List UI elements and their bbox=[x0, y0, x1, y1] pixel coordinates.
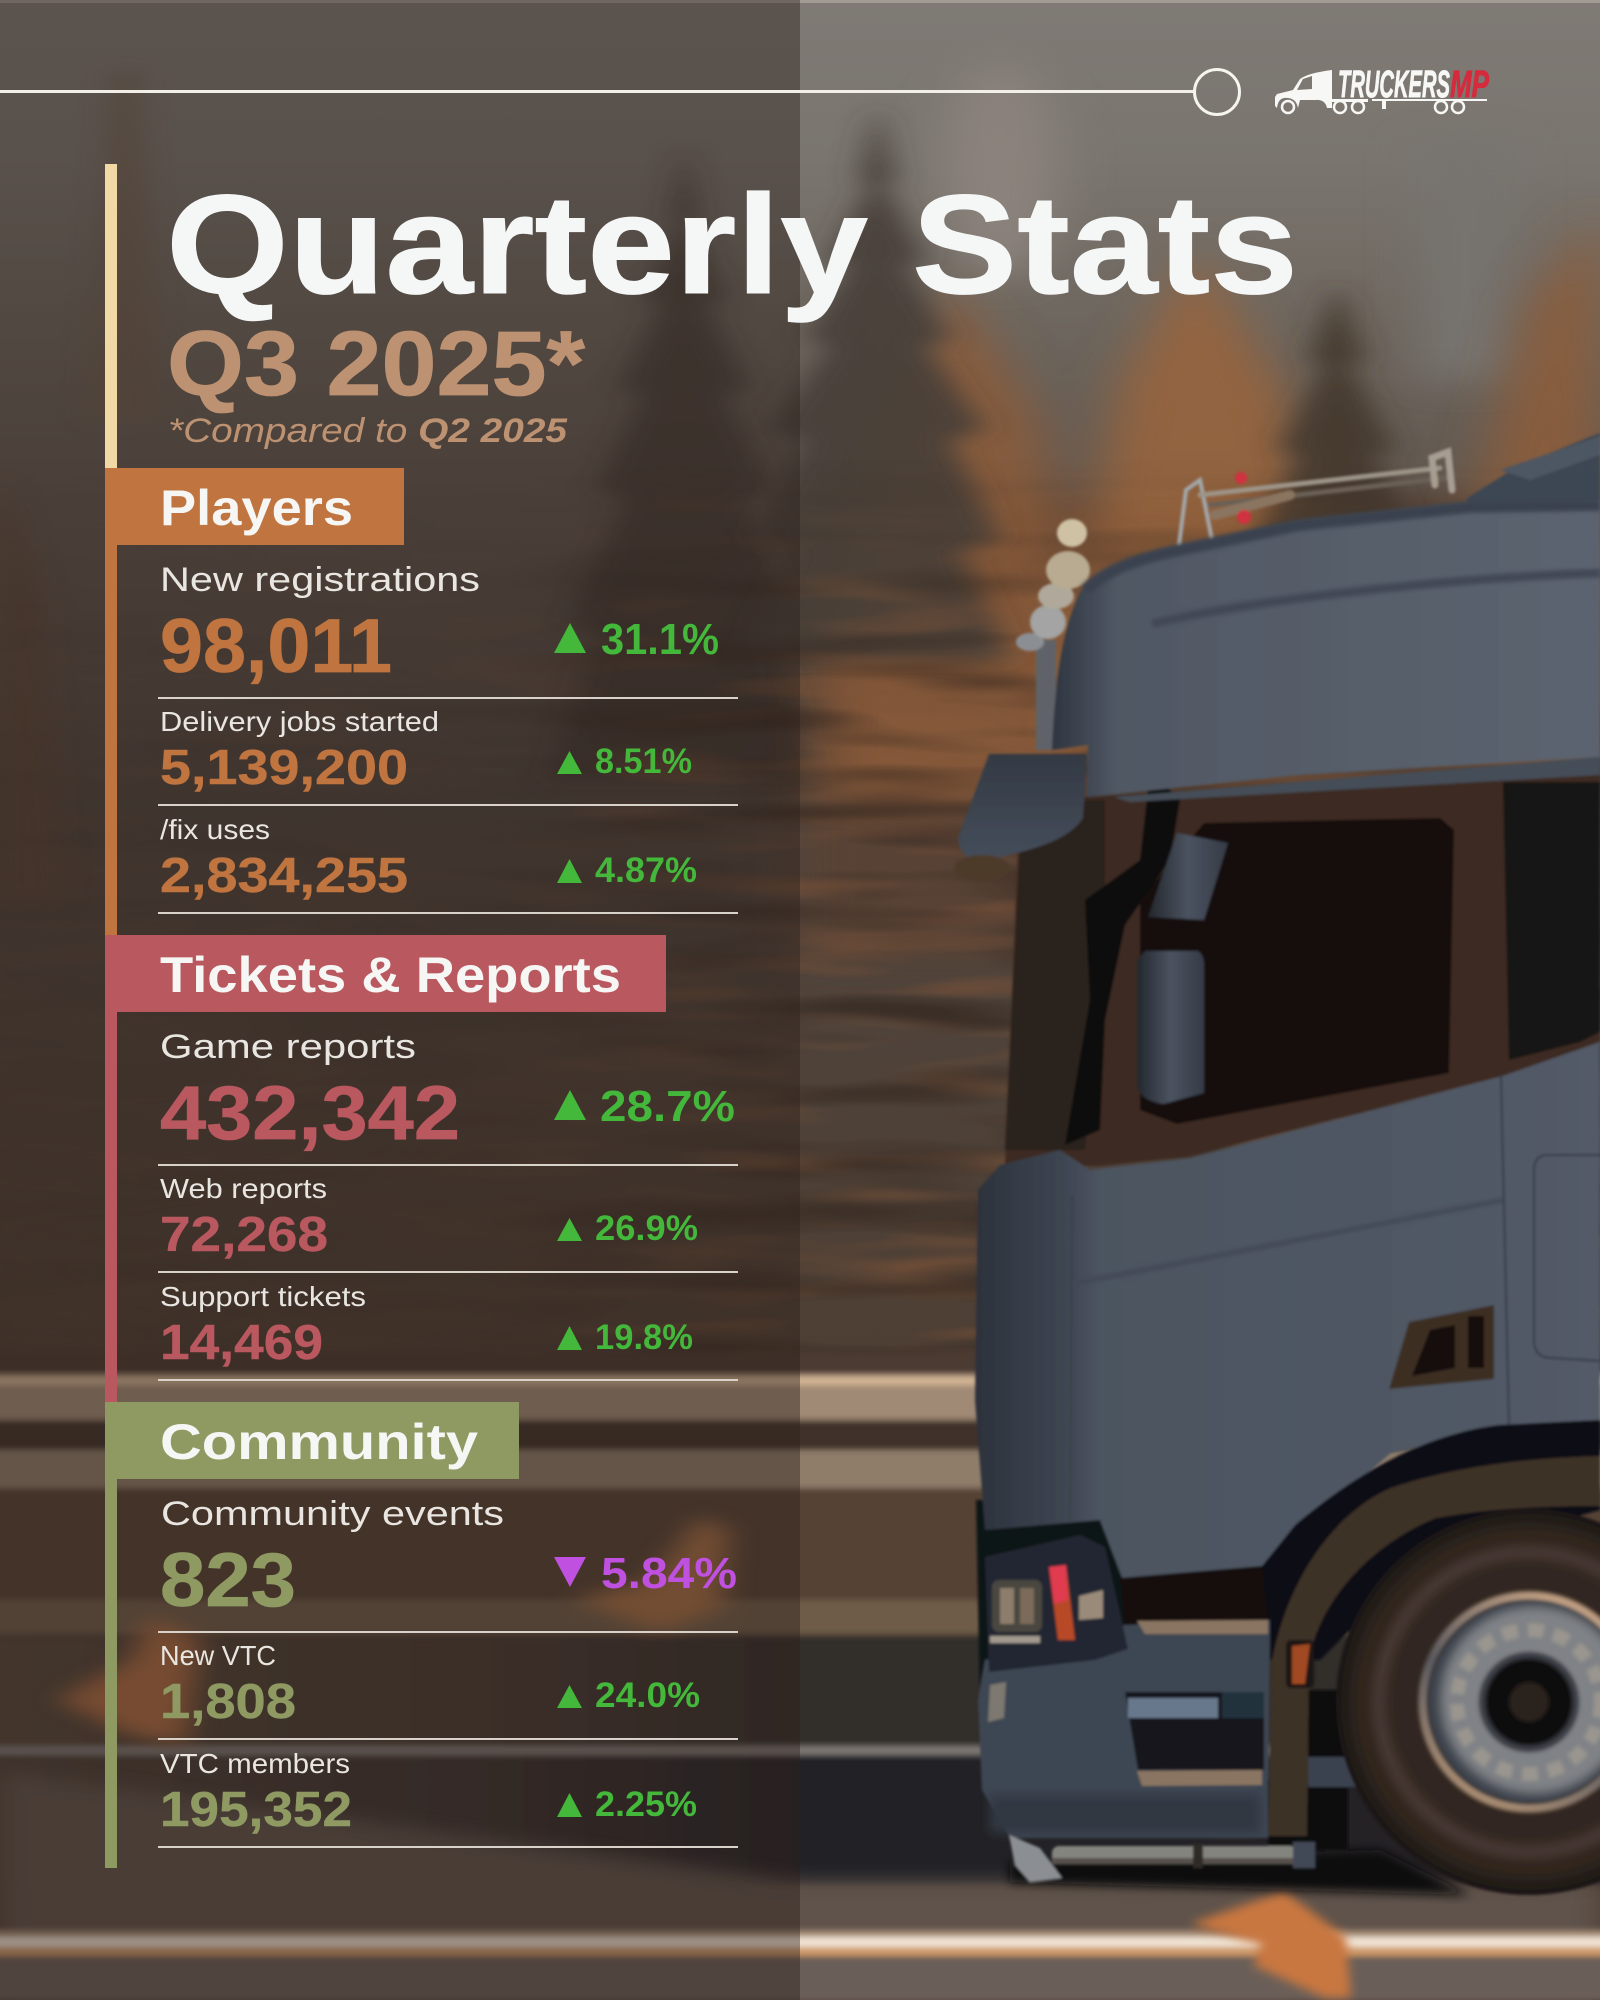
metric: /fix uses: 4.87% bbox=[595, 851, 697, 890]
truck: bumper shade bbox=[990, 1795, 1260, 1833]
metric: Community events bbox=[158, 1495, 738, 1633]
metric: Game reports: Game reports bbox=[160, 1028, 416, 1066]
metric: /fix uses bbox=[158, 814, 738, 914]
section bar bbox=[105, 1402, 117, 1868]
truck: lower cab body bbox=[975, 1042, 1600, 1580]
metric: New VTC bbox=[158, 1640, 738, 1740]
logo truck silhouette bbox=[1275, 70, 1487, 113]
metric: Delivery jobs started: Delivery jobs started bbox=[160, 706, 439, 737]
title: Quarterly Stats bbox=[166, 165, 1298, 323]
metric: /fix uses: 2,834,255 bbox=[160, 849, 408, 903]
truck: upper cab body bbox=[1052, 500, 1600, 797]
motion streak texture bbox=[624, 528, 1600, 1347]
truck: brown window frame and pillar bbox=[1005, 770, 1600, 1166]
panel: Players bbox=[105, 468, 738, 935]
title accent bar bbox=[105, 164, 117, 468]
truck: roof horns bbox=[1179, 452, 1452, 545]
section heading bbox=[105, 1402, 519, 1479]
metric: VTC members: 2.25% bbox=[595, 1785, 697, 1824]
truck: dark pillar shadow bbox=[1005, 800, 1105, 1150]
section heading: Community bbox=[160, 1414, 478, 1470]
metric: Community events: 5.84% bbox=[601, 1549, 737, 1598]
truck: door handle recess bbox=[1389, 1305, 1494, 1389]
metric: New VTC: New VTC bbox=[160, 1640, 276, 1671]
truck: roof dark edge bbox=[1085, 505, 1600, 590]
metric: Game reports: 432,342 bbox=[160, 1071, 460, 1156]
panel-side dark tree bbox=[548, 143, 820, 780]
metric: New registrations bbox=[158, 561, 738, 699]
truck: front bumper bbox=[978, 1620, 1270, 1838]
metric: Support tickets: Support tickets bbox=[160, 1281, 366, 1312]
truck: side window glass bbox=[1140, 818, 1454, 1124]
section heading bbox=[105, 468, 404, 545]
truck: black wheel arch bbox=[1255, 1420, 1600, 1660]
truck: fog lamp bbox=[988, 1682, 1006, 1722]
metric: Delivery jobs started: 8.51% bbox=[595, 742, 692, 781]
truck: headlight cluster bbox=[985, 1535, 1128, 1672]
metric: Game reports: 28.7% bbox=[600, 1082, 735, 1131]
truck: black band under headlight bbox=[1120, 1566, 1268, 1625]
main dark tree bbox=[744, 105, 1010, 660]
metric: Support tickets: 19.8% bbox=[595, 1318, 693, 1357]
metric: Web reports: 26.9% bbox=[595, 1209, 698, 1248]
truck: air deflector bbox=[1467, 433, 1600, 510]
metric: VTC members: 195,352 bbox=[160, 1783, 352, 1837]
truck: upper wing mirror bbox=[1148, 833, 1228, 920]
truck: roof crease bbox=[1152, 573, 1600, 624]
metric: New registrations: 31.1% bbox=[601, 615, 719, 664]
panel: Tickets & Reports bbox=[105, 935, 738, 1402]
section heading: Players bbox=[160, 480, 353, 536]
divider line with ring bbox=[0, 70, 1240, 114]
truck: lower wing mirror bbox=[1137, 951, 1204, 1104]
logo wordmark: TRUCKERS bbox=[1338, 64, 1450, 106]
metric: Community events: Community events bbox=[161, 1495, 504, 1533]
truck: side marker lamp bbox=[1286, 1640, 1314, 1688]
section bar bbox=[105, 935, 117, 1402]
truck: bumper air intake bbox=[1125, 1692, 1264, 1770]
road arrows, blurred bbox=[57, 1516, 1351, 1998]
orange trees behind cab bbox=[820, 210, 1600, 800]
truck: door window glass bbox=[1503, 782, 1600, 1060]
metric: Game reports bbox=[158, 1028, 738, 1166]
metric: Delivery jobs started bbox=[158, 706, 738, 806]
truck: tow eye bbox=[1009, 1835, 1062, 1882]
metric: Community events: 823 bbox=[160, 1538, 296, 1623]
logo: TruckersMP bbox=[1275, 64, 1489, 113]
metric: New VTC: 24.0% bbox=[595, 1676, 700, 1715]
metric: New registrations: New registrations bbox=[160, 561, 480, 599]
truck: front corner seam bbox=[1070, 1195, 1072, 1520]
metric: New registrations: 98,011 bbox=[160, 604, 392, 689]
truck cab illustration bbox=[954, 433, 1600, 1895]
truck: brown fender bbox=[1268, 1456, 1600, 1836]
metric: Web reports: Web reports bbox=[160, 1173, 327, 1204]
truck: sun visor mirror bbox=[958, 754, 1087, 862]
section heading bbox=[105, 935, 666, 1012]
section heading: Tickets & Reports bbox=[160, 947, 621, 1003]
panel: translucent left column bbox=[0, 0, 800, 2000]
metric: New VTC: 1,808 bbox=[160, 1675, 296, 1729]
truck: side bar bbox=[1308, 1690, 1348, 1790]
truck: door seam and side panel bbox=[1501, 1076, 1600, 1425]
metric: VTC members bbox=[158, 1748, 738, 1848]
metric: Web reports bbox=[158, 1173, 738, 1273]
metric: Support tickets bbox=[158, 1281, 738, 1381]
truck: bumper tan strips bbox=[1137, 1620, 1268, 1786]
comparison note: *Compared to Q2 2025 bbox=[168, 412, 568, 450]
truck: brow strip bbox=[1114, 757, 1600, 802]
metric: /fix uses: /fix uses bbox=[160, 814, 270, 845]
right dark tree bbox=[1225, 283, 1450, 720]
metric: Web reports: 72,268 bbox=[160, 1208, 328, 1262]
road and guard rail bands bbox=[0, 1352, 1600, 1885]
truck: mascot figure bbox=[1016, 519, 1090, 750]
metric: Support tickets: 14,469 bbox=[160, 1316, 323, 1370]
subtitle: Q3 2025* bbox=[167, 313, 585, 415]
truck: front wheel bbox=[1336, 1509, 1600, 1895]
panel: Community bbox=[105, 1402, 738, 1868]
metric: Delivery jobs started: 5,139,200 bbox=[160, 741, 408, 795]
logo: TruckersMP: MP bbox=[1450, 64, 1489, 106]
section bar bbox=[105, 468, 117, 935]
metric: VTC members: VTC members bbox=[160, 1748, 350, 1779]
truck: body crease bbox=[1072, 1200, 1503, 1284]
truck: chrome step bar bbox=[1052, 1842, 1315, 1868]
truck: under-vehicle shadow bbox=[1010, 1850, 1470, 1895]
truck: dark base behind front lower bbox=[976, 1500, 1140, 1700]
